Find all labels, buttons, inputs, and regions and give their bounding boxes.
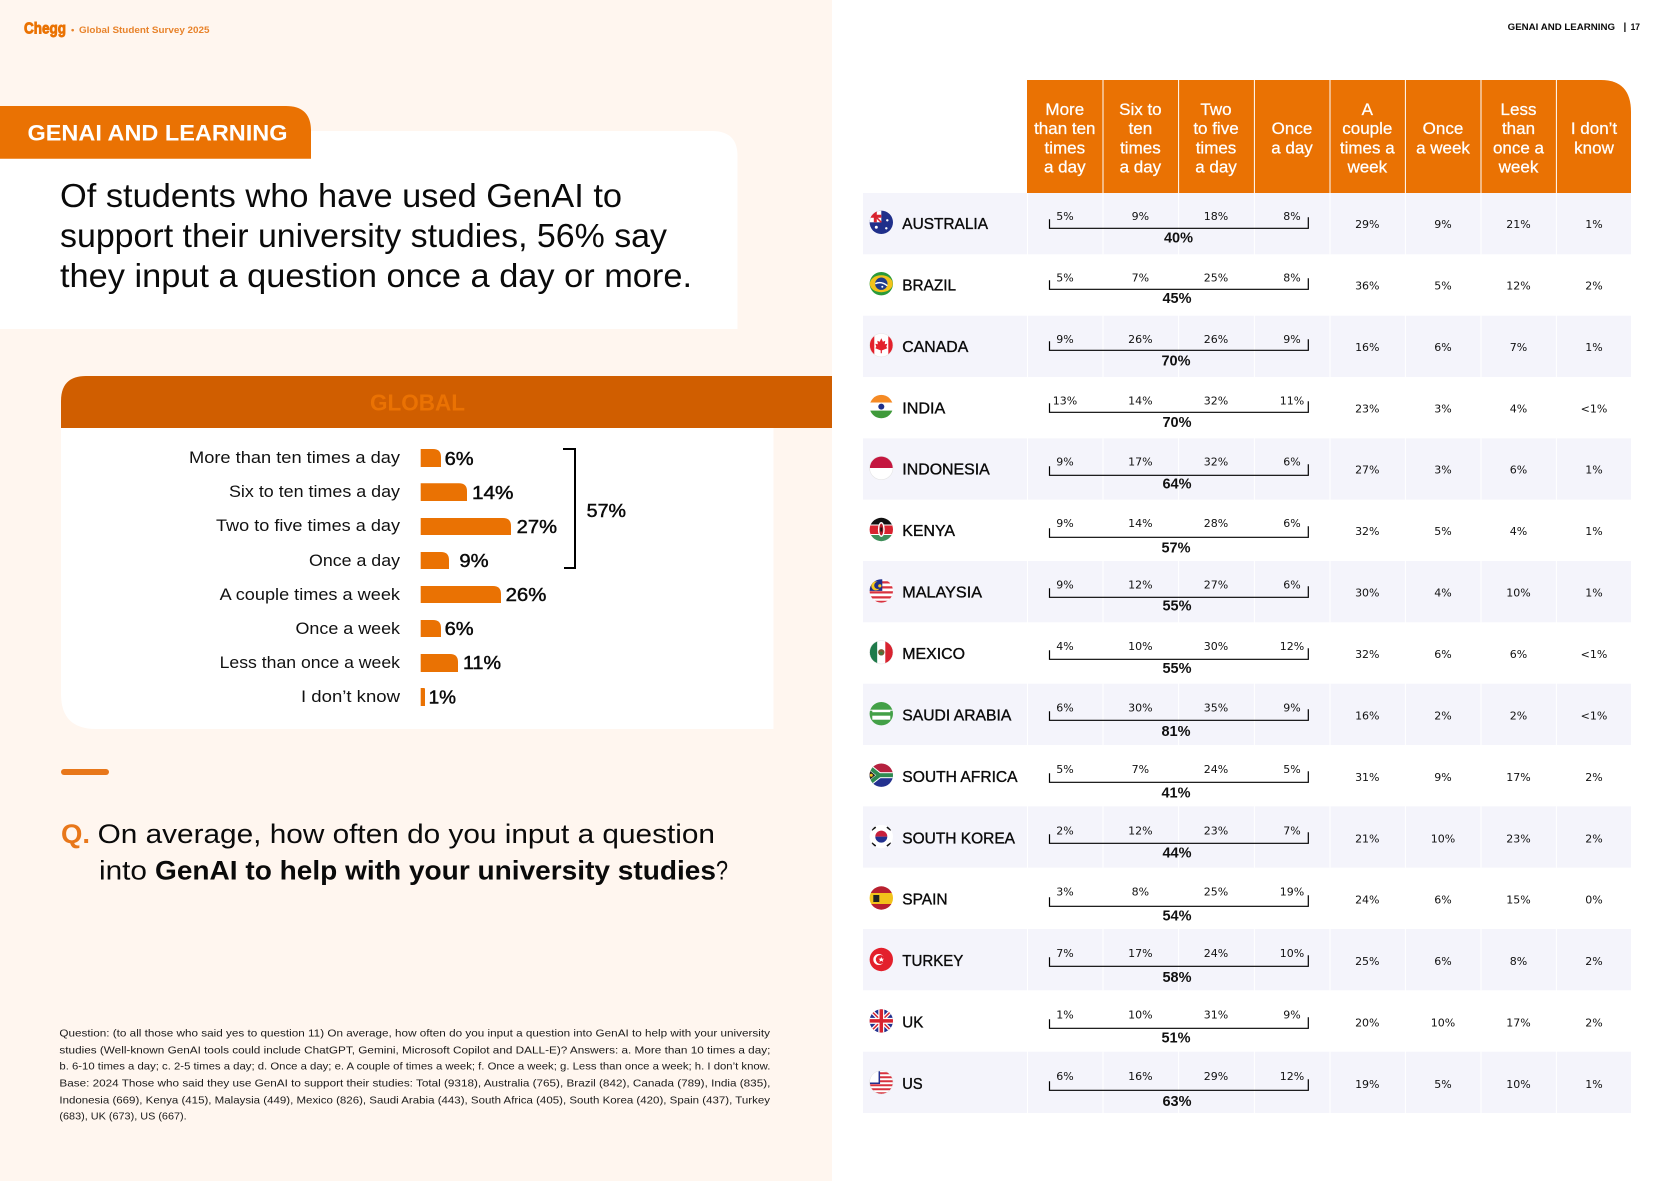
icon: South Korea flag [869,825,893,849]
values: 30% [1355,587,1380,600]
values: 10% [1128,1009,1153,1022]
column: six to ten times a day: a day [1120,157,1162,176]
country name: TURKEY [902,953,963,970]
values: 13% [1053,394,1077,407]
page marker: 17 [1631,22,1640,33]
values: 9% [1283,701,1301,714]
country name: INDIA [902,400,946,417]
column: once a day: a day [1271,138,1313,157]
question: On average, how often do you input a question [98,819,715,849]
brand header [24,20,210,38]
values: 45% [1162,291,1192,307]
bar: I don't know: 1% [429,688,456,708]
panel: global chart [61,376,832,729]
values: 9% [1056,333,1074,346]
values: 19% [1355,1078,1380,1091]
daily bracket [1050,1017,1308,1028]
values: 17% [1128,947,1153,960]
values: 5% [1283,763,1301,776]
values: 9% [1434,218,1452,231]
country name: INDONESIA [902,462,990,479]
values: 6% [1056,701,1074,714]
values: 1% [1585,1078,1603,1091]
column: I don't know: know [1574,138,1615,157]
icon: Mexico flag [869,640,893,664]
values [1053,394,1607,431]
section heading: GENAI AND LEARNING [28,120,288,146]
column: two to five times a day: to five [1193,119,1239,138]
row: South Africa [870,764,1602,798]
values: 57% [1161,540,1191,556]
daily bracket [1050,832,1308,843]
column: once a day: Once [1272,119,1312,138]
values: 32% [1204,456,1228,469]
icon: India flag [869,395,893,419]
values: 25% [1355,955,1380,968]
values: 20% [1355,1017,1380,1030]
daily bracket [1050,648,1308,659]
column: more than ten times a day: More [1045,100,1084,119]
bar: once a day: Once a day [309,551,401,570]
values: 5% [1056,763,1074,776]
values: 2% [1510,709,1527,722]
values: 23% [1204,824,1228,837]
values: 70% [1162,415,1192,431]
country name: SPAIN [902,892,948,909]
values: 54% [1162,908,1192,924]
country name: CANADA [902,339,969,356]
chart body [61,428,774,729]
country name: UK [902,1015,924,1032]
question: ? [716,856,728,886]
bar: more than ten times a day: More than ten times a day [189,448,401,467]
values: 19% [1280,886,1304,899]
daily bracket [1050,278,1308,289]
values: 24% [1355,894,1380,907]
question [61,819,728,886]
values: 44% [1162,846,1192,862]
row: Turkey [870,948,1602,982]
chart header band [61,376,832,428]
daily total value: 57% [587,501,626,521]
column: more than ten times a day: a day [1044,157,1086,176]
values: 21% [1506,218,1531,231]
column: once a week: a week [1416,138,1470,157]
bar: six to ten times a day [229,482,514,503]
row: South Korea [870,825,1602,858]
values: 6% [1283,579,1301,592]
bar: more than ten times a day [189,448,474,469]
values: <1% [1581,709,1607,722]
daily bracket [1050,401,1308,412]
values: 7% [1283,824,1301,837]
values: 7% [1056,947,1074,960]
bar: a couple times a week: 26% [506,585,546,605]
bar: six to ten times a day: 14% [472,483,514,503]
column: two to five times a day: a day [1195,157,1237,176]
column: a couple times a week: couple [1342,119,1392,138]
row: Saudi Arabia [870,702,1607,736]
daily bracket [1050,217,1308,228]
values: 27% [1204,579,1228,592]
values [1056,947,1603,986]
column: once a week: Once [1423,119,1463,138]
row: Canada [869,333,1602,366]
values: 31% [1204,1009,1228,1022]
values: 3% [1056,886,1074,899]
values: 29% [1204,1070,1228,1083]
column: I don't know: I don’t [1571,119,1617,138]
country name: US [902,1076,923,1093]
values: 24% [1204,947,1228,960]
values [1056,271,1603,307]
values: 12% [1280,640,1304,653]
column: two to five times a day: times [1196,138,1236,157]
icon: South Africa flag [869,763,893,787]
values: 12% [1128,579,1153,592]
values: 21% [1355,832,1380,845]
country name: MEXICO [902,646,965,663]
page marker: GENAI AND LEARNING [1508,22,1615,33]
footnote [59,1028,771,1123]
section tab [0,106,311,159]
values [1056,210,1603,247]
icon: UK flag [869,1009,893,1033]
headline text [60,177,692,294]
question: GenAI to help with your university studies [155,856,716,886]
daily bracket [1050,464,1308,475]
values: 9% [1056,517,1074,530]
values: 6% [1434,894,1452,907]
values: 32% [1355,648,1380,661]
values: 23% [1506,832,1531,845]
values: 17% [1128,456,1153,469]
row: Indonesia [869,456,1602,488]
values: 17% [1506,1017,1531,1030]
values: 17% [1506,771,1531,784]
values: 32% [1355,525,1380,538]
values: 40% [1164,231,1193,247]
values: 18% [1204,210,1228,223]
values: 30% [1204,640,1228,653]
values: 41% [1161,785,1191,801]
values: 6% [1510,464,1527,477]
values: 15% [1506,894,1531,907]
footnote: studies (Well-known GenAI tools could include ChatGPT, Gemini, Microsoft Copilot and DALL-E)? Answers: a. More than 10 times a day; [59,1044,770,1056]
values: 26% [1128,333,1153,346]
values: 6% [1283,517,1301,530]
values: 31% [1355,771,1380,784]
chart heading: GLOBAL [370,390,465,416]
values: 9% [1283,333,1301,346]
values: 30% [1128,701,1153,714]
column: less than once a week: than [1502,119,1535,138]
values: 2% [1585,1017,1603,1030]
icon: Indonesia flag [869,456,893,480]
values: 9% [1132,210,1149,223]
values: 1% [1585,525,1603,538]
bar: two to five times a day [216,516,557,537]
table header band [1027,80,1631,193]
values: 25% [1204,886,1228,899]
values: 28% [1204,517,1228,530]
icon: Spain flag [869,886,893,910]
row: Kenya [870,518,1602,552]
icon: Kenya flag [869,518,893,542]
values: 7% [1132,271,1149,284]
bar: I don't know [301,687,456,708]
values: 8% [1283,210,1301,223]
daily bracket [1050,895,1308,906]
values [1056,579,1603,615]
values: 3% [1434,402,1452,415]
values: 36% [1355,279,1380,292]
survey name: • [71,25,74,36]
values: 25% [1204,271,1228,284]
accent dash [61,769,109,775]
daily bracket [1050,771,1308,782]
row: US [869,1070,1602,1106]
values: 23% [1355,402,1380,415]
bar: two to five times a day: Two to five times a day [216,516,401,535]
values [1056,763,1603,801]
values: 24% [1204,763,1228,776]
column: less than once a week: week [1498,157,1539,176]
row: UK [870,1009,1602,1042]
values [1056,1070,1603,1110]
values [1056,701,1607,740]
headline text: they input a question once a day or more. [60,257,692,294]
column: more than ten times a day: than ten [1034,119,1096,138]
table row shading [863,193,1631,1113]
values: 6% [1434,955,1452,968]
values: 4% [1056,640,1074,653]
values: 6% [1434,648,1452,661]
values: 6% [1056,1070,1074,1083]
values: 27% [1355,464,1380,477]
row: Mexico [869,640,1607,673]
values: 32% [1204,394,1228,407]
values: 0% [1585,894,1603,907]
values: 8% [1283,271,1301,284]
logo: Chegg: Chegg [24,20,66,38]
values: 10% [1280,947,1304,960]
daily bracket [1050,586,1308,597]
country name: SAUDI ARABIA [902,707,1012,724]
bar: once a week: 6% [445,619,474,639]
bar: six to ten times a day: Six to ten times a day [229,482,401,501]
values: 29% [1355,218,1380,231]
values: 5% [1434,525,1452,538]
values: 5% [1056,210,1074,223]
values [1056,456,1603,493]
page marker: | [1624,22,1626,33]
footnote: Question: (to all those who said yes to question 11) On average, how often do you input a question into GenAI to help with your university [59,1028,771,1040]
values: 10% [1506,1078,1531,1091]
values: 51% [1161,1030,1191,1046]
headline text: support their university studies, 56% say [60,217,668,254]
country name: KENYA [902,523,956,540]
values: 16% [1355,341,1380,354]
values: 10% [1431,832,1455,845]
values: 9% [1056,456,1074,469]
icon: Saudi Arabia flag [869,702,893,726]
bar: less than once a week: 11% [463,653,501,673]
values [1056,333,1603,370]
daily bracket [1050,339,1308,350]
values: 14% [1128,517,1153,530]
country name: BRAZIL [902,277,956,294]
values: 2% [1585,955,1603,968]
row: Spain [870,886,1602,920]
survey name: Global Student Survey 2025 [79,25,210,36]
column: two to five times a day: Two [1200,100,1232,119]
icon: Canada flag [869,333,893,357]
row: India [870,394,1607,427]
question: Q. [61,819,90,849]
values: 6% [1510,648,1527,661]
row: Malaysia [870,579,1602,610]
country name: SOUTH KOREA [902,830,1016,847]
bar: once a day [309,551,489,571]
row: Brazil [870,272,1602,303]
values: 12% [1280,1070,1304,1083]
bar: two to five times a day: 27% [517,517,557,537]
values: 5% [1434,279,1452,292]
values: 16% [1128,1070,1153,1083]
values [1056,517,1603,556]
values: 9% [1434,771,1452,784]
values: 9% [1056,579,1074,592]
footnote: Indonesia (669), Kenya (415), Malaysia (449), Mexico (826), Saudi Arabia (443), South Africa (405), South Korea (420), Spain (437), Turkey [59,1094,771,1106]
bar: a couple times a week [220,585,546,605]
values: 4% [1434,587,1452,600]
daily bracket [1050,709,1308,720]
values: 70% [1161,354,1191,370]
left page background [0,0,832,1181]
question: into [99,856,147,886]
icon: Turkey flag [869,948,893,972]
values: <1% [1581,648,1607,661]
column: six to ten times a day: ten [1129,119,1152,138]
daily bracket [1050,526,1308,537]
row: Australia [870,210,1602,242]
values: 55% [1162,599,1192,615]
values: 2% [1585,832,1603,845]
values [1056,640,1607,677]
values: 1% [1585,218,1603,231]
values: 7% [1132,763,1149,776]
values: 64% [1162,477,1192,493]
values: 35% [1204,701,1228,714]
bar: once a day: 9% [459,551,489,571]
right page background [832,0,1663,1181]
panel: headline card [0,131,738,329]
values: 1% [1585,587,1603,600]
values: 9% [1283,1009,1301,1022]
values: 1% [1056,1009,1074,1022]
column: less than once a week: once a [1493,138,1545,157]
values: 8% [1132,886,1149,899]
values: 6% [1434,341,1452,354]
values: 7% [1510,341,1527,354]
column: more than ten times a day: times [1044,138,1085,157]
values [1056,886,1603,924]
values: 10% [1431,1017,1455,1030]
values: 5% [1434,1078,1452,1091]
values: 16% [1355,709,1380,722]
column: six to ten times a day: times [1120,138,1161,157]
values: 11% [1280,394,1304,407]
icon: Malaysia flag [869,579,893,603]
values: 2% [1434,709,1452,722]
icon: US flag [869,1070,893,1094]
values [1056,1009,1603,1046]
values: 1% [1585,341,1603,354]
country name: AUSTRALIA [902,216,989,233]
values: 2% [1056,824,1074,837]
bar: more than ten times a day: 6% [445,449,474,469]
values: 12% [1128,824,1153,837]
values: 5% [1056,271,1074,284]
values: 10% [1506,587,1531,600]
values: 81% [1161,724,1191,740]
bar: less than once a week [220,653,501,673]
values: 4% [1510,525,1527,538]
daily bracket [1050,1079,1308,1090]
table column headings [1034,100,1617,176]
bar: once a week: Once a week [296,619,401,638]
values: 58% [1162,970,1192,986]
values: 2% [1585,279,1603,292]
column: a couple times a week: week [1346,157,1388,176]
bar: once a week [296,619,474,639]
values: 26% [1204,333,1228,346]
daily bracket [1050,955,1308,966]
values: 12% [1506,279,1531,292]
column: a couple times a week: times a [1340,138,1395,157]
footnote: Base: 2024 Those who said they use GenAI to support their studies: Total (9318), Australia (765), Brazil (842), Canada (789), India (835), [59,1077,770,1089]
country name: MALAYSIA [902,585,983,602]
values: 4% [1510,402,1527,415]
headline text: Of students who have used GenAI to [60,177,622,214]
values: 2% [1585,771,1603,784]
values: 1% [1585,464,1603,477]
values: 6% [1283,456,1301,469]
values [1056,824,1603,862]
footnote: b. 6-10 times a day; c. 2-5 times a day; d. Once a day; e. A couple of times a week; f. Once a week; g. Less than once a week; h. I don’t know. [59,1061,770,1073]
bracket: daily total [563,449,575,568]
bar: I don't know: I don’t know [301,687,401,706]
column: six to ten times a day: Six to [1119,100,1162,119]
values: 10% [1128,640,1153,653]
values: <1% [1581,402,1607,415]
values: 8% [1510,955,1527,968]
values: 63% [1162,1094,1192,1110]
values: 14% [1128,394,1153,407]
values: 55% [1162,661,1192,677]
column: less than once a week: Less [1501,100,1536,119]
footnote: (683), UK (673), US (667). [59,1111,187,1123]
bar: a couple times a week: A couple times a week [220,585,401,604]
values: 3% [1434,464,1452,477]
country name: SOUTH AFRICA [902,769,1018,786]
bar: less than once a week: Less than once a week [220,653,401,672]
icon: Brazil flag [869,272,893,296]
icon: Australia flag [869,210,893,234]
column: a couple times a week: A [1362,100,1374,119]
